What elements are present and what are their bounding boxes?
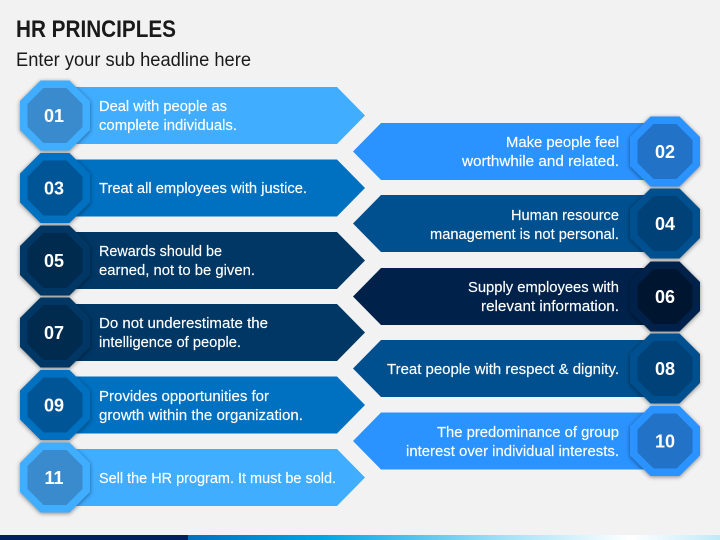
principle 01 [20, 80, 365, 150]
principle 07: 07 [44, 323, 64, 343]
principle 01: Deal with people as [99, 98, 227, 115]
principle 08 [353, 334, 700, 404]
principle 09: Provides opportunities for [99, 388, 269, 405]
principle 05: Rewards should be [99, 243, 222, 260]
principle 10: 10 [655, 432, 675, 452]
principle 06: relevant information. [481, 298, 619, 315]
principle 09: 09 [44, 396, 64, 416]
principle 09 [20, 370, 365, 440]
footer bar [0, 535, 720, 540]
principle 04: 04 [655, 214, 675, 234]
principle 06: 06 [655, 287, 675, 307]
principle 09: growth within the organization. [99, 407, 303, 424]
principle 10: interest over individual interests. [406, 443, 619, 460]
principle 11: 11 [44, 468, 64, 488]
principle 05: earned, not to be given. [99, 262, 255, 279]
principle 01: 01 [44, 106, 64, 126]
principle 04: Human resource [511, 207, 619, 224]
principle 07: intelligence of people. [99, 334, 241, 351]
principle 10 [353, 406, 700, 476]
principle 03: 03 [44, 178, 64, 198]
principle 05: 05 [44, 251, 64, 271]
principle 01: complete individuals. [99, 117, 237, 134]
principle 04: management is not personal. [430, 226, 619, 243]
principle 07: Do not underestimate the [99, 315, 268, 332]
principle 10: The predominance of group [437, 424, 619, 441]
principle 08: 08 [655, 359, 675, 379]
principle 08: Treat people with respect & dignity. [387, 361, 619, 378]
principle 11: Sell the HR program. It must be sold. [99, 470, 336, 487]
title: HR PRINCIPLES [16, 16, 176, 43]
principle 02: 02 [655, 142, 675, 162]
principle 03: Treat all employees with justice. [99, 180, 307, 197]
principle 02: worthwhile and related. [461, 153, 619, 170]
principle 02: Make people feel [506, 134, 619, 151]
principle 06 [353, 262, 700, 332]
principle 04 [353, 188, 700, 258]
principle 11 [20, 442, 365, 512]
principle 02 [353, 116, 700, 186]
principle 05 [20, 226, 365, 296]
principle 06: Supply employees with [468, 279, 619, 296]
principle 03 [20, 153, 365, 223]
subtitle: Enter your sub headline here [16, 50, 251, 71]
principle 07 [20, 298, 365, 368]
